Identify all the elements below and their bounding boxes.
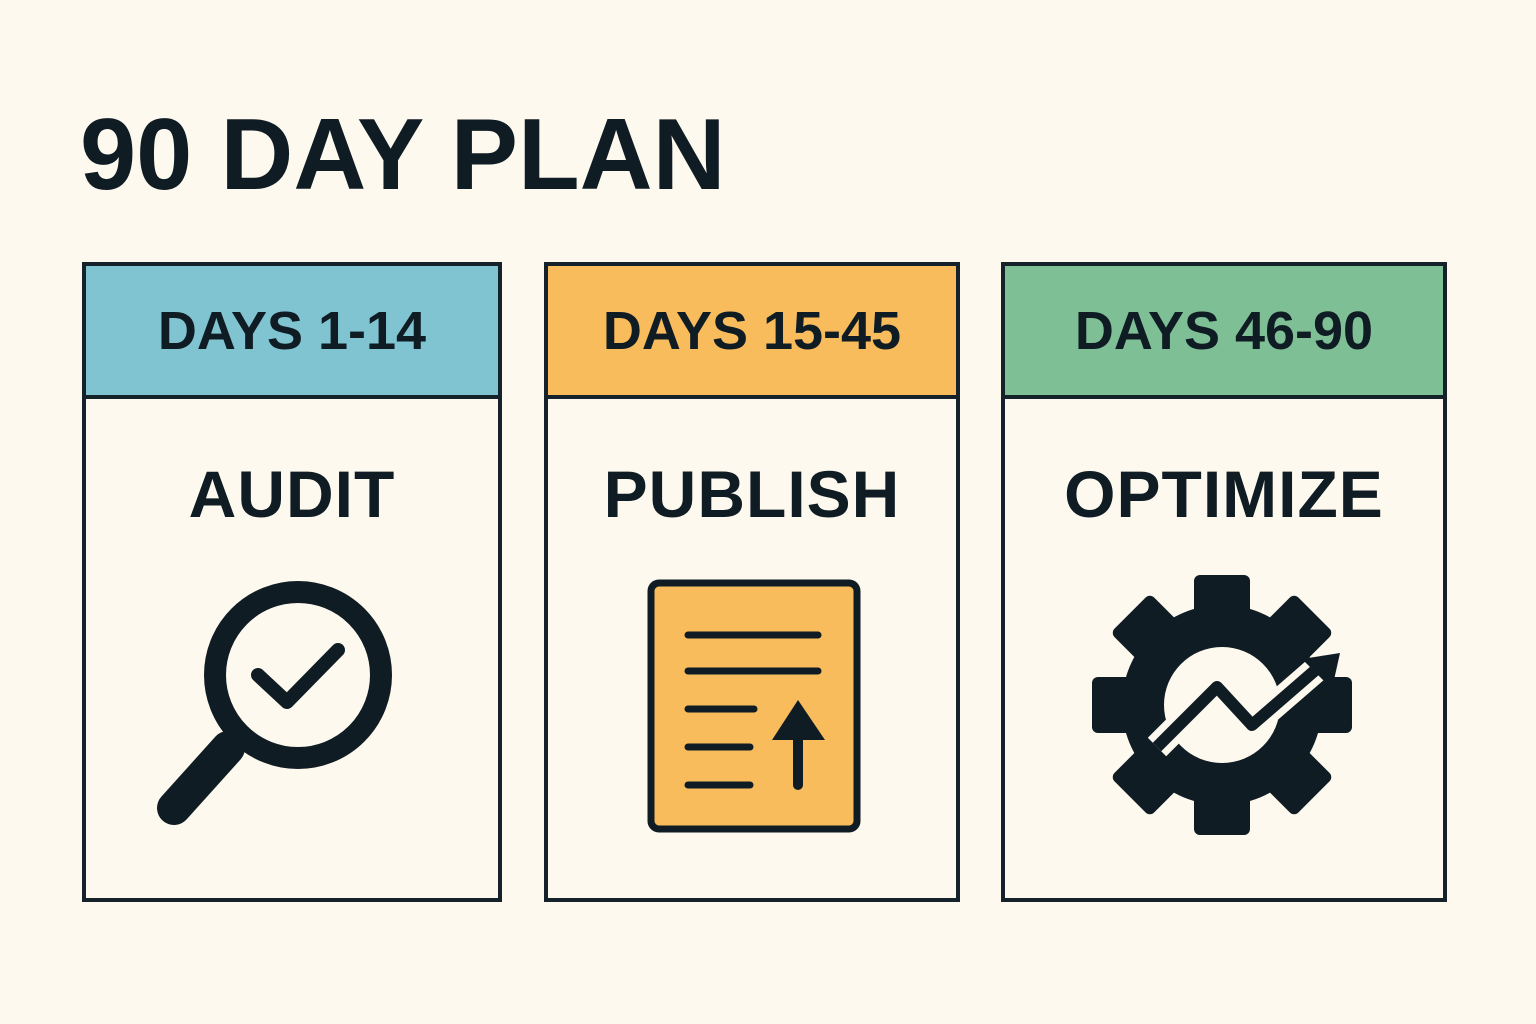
icon: document with upload arrow xyxy=(651,583,857,829)
panel: publish xyxy=(544,262,960,902)
panel: audit xyxy=(82,262,502,902)
label: publish: PUBLISH xyxy=(604,457,900,531)
header: days 46-90: DAYS 46-90 xyxy=(1075,301,1373,361)
header: days 1-14 xyxy=(86,266,498,399)
header: days 15-45: DAYS 15-45 xyxy=(603,301,901,361)
header: days 15-45 xyxy=(548,266,956,399)
icon: magnifier with check xyxy=(174,592,381,808)
label: audit: AUDIT xyxy=(189,457,395,531)
header: days 1-14: DAYS 1-14 xyxy=(158,301,426,361)
header: days 46-90 xyxy=(1005,266,1443,399)
label: optimize: OPTIMIZE xyxy=(1064,457,1384,531)
panel: optimize xyxy=(1001,262,1447,902)
icon: gear with trend arrow xyxy=(1092,575,1352,835)
title: 90 DAY PLAN xyxy=(80,99,726,211)
